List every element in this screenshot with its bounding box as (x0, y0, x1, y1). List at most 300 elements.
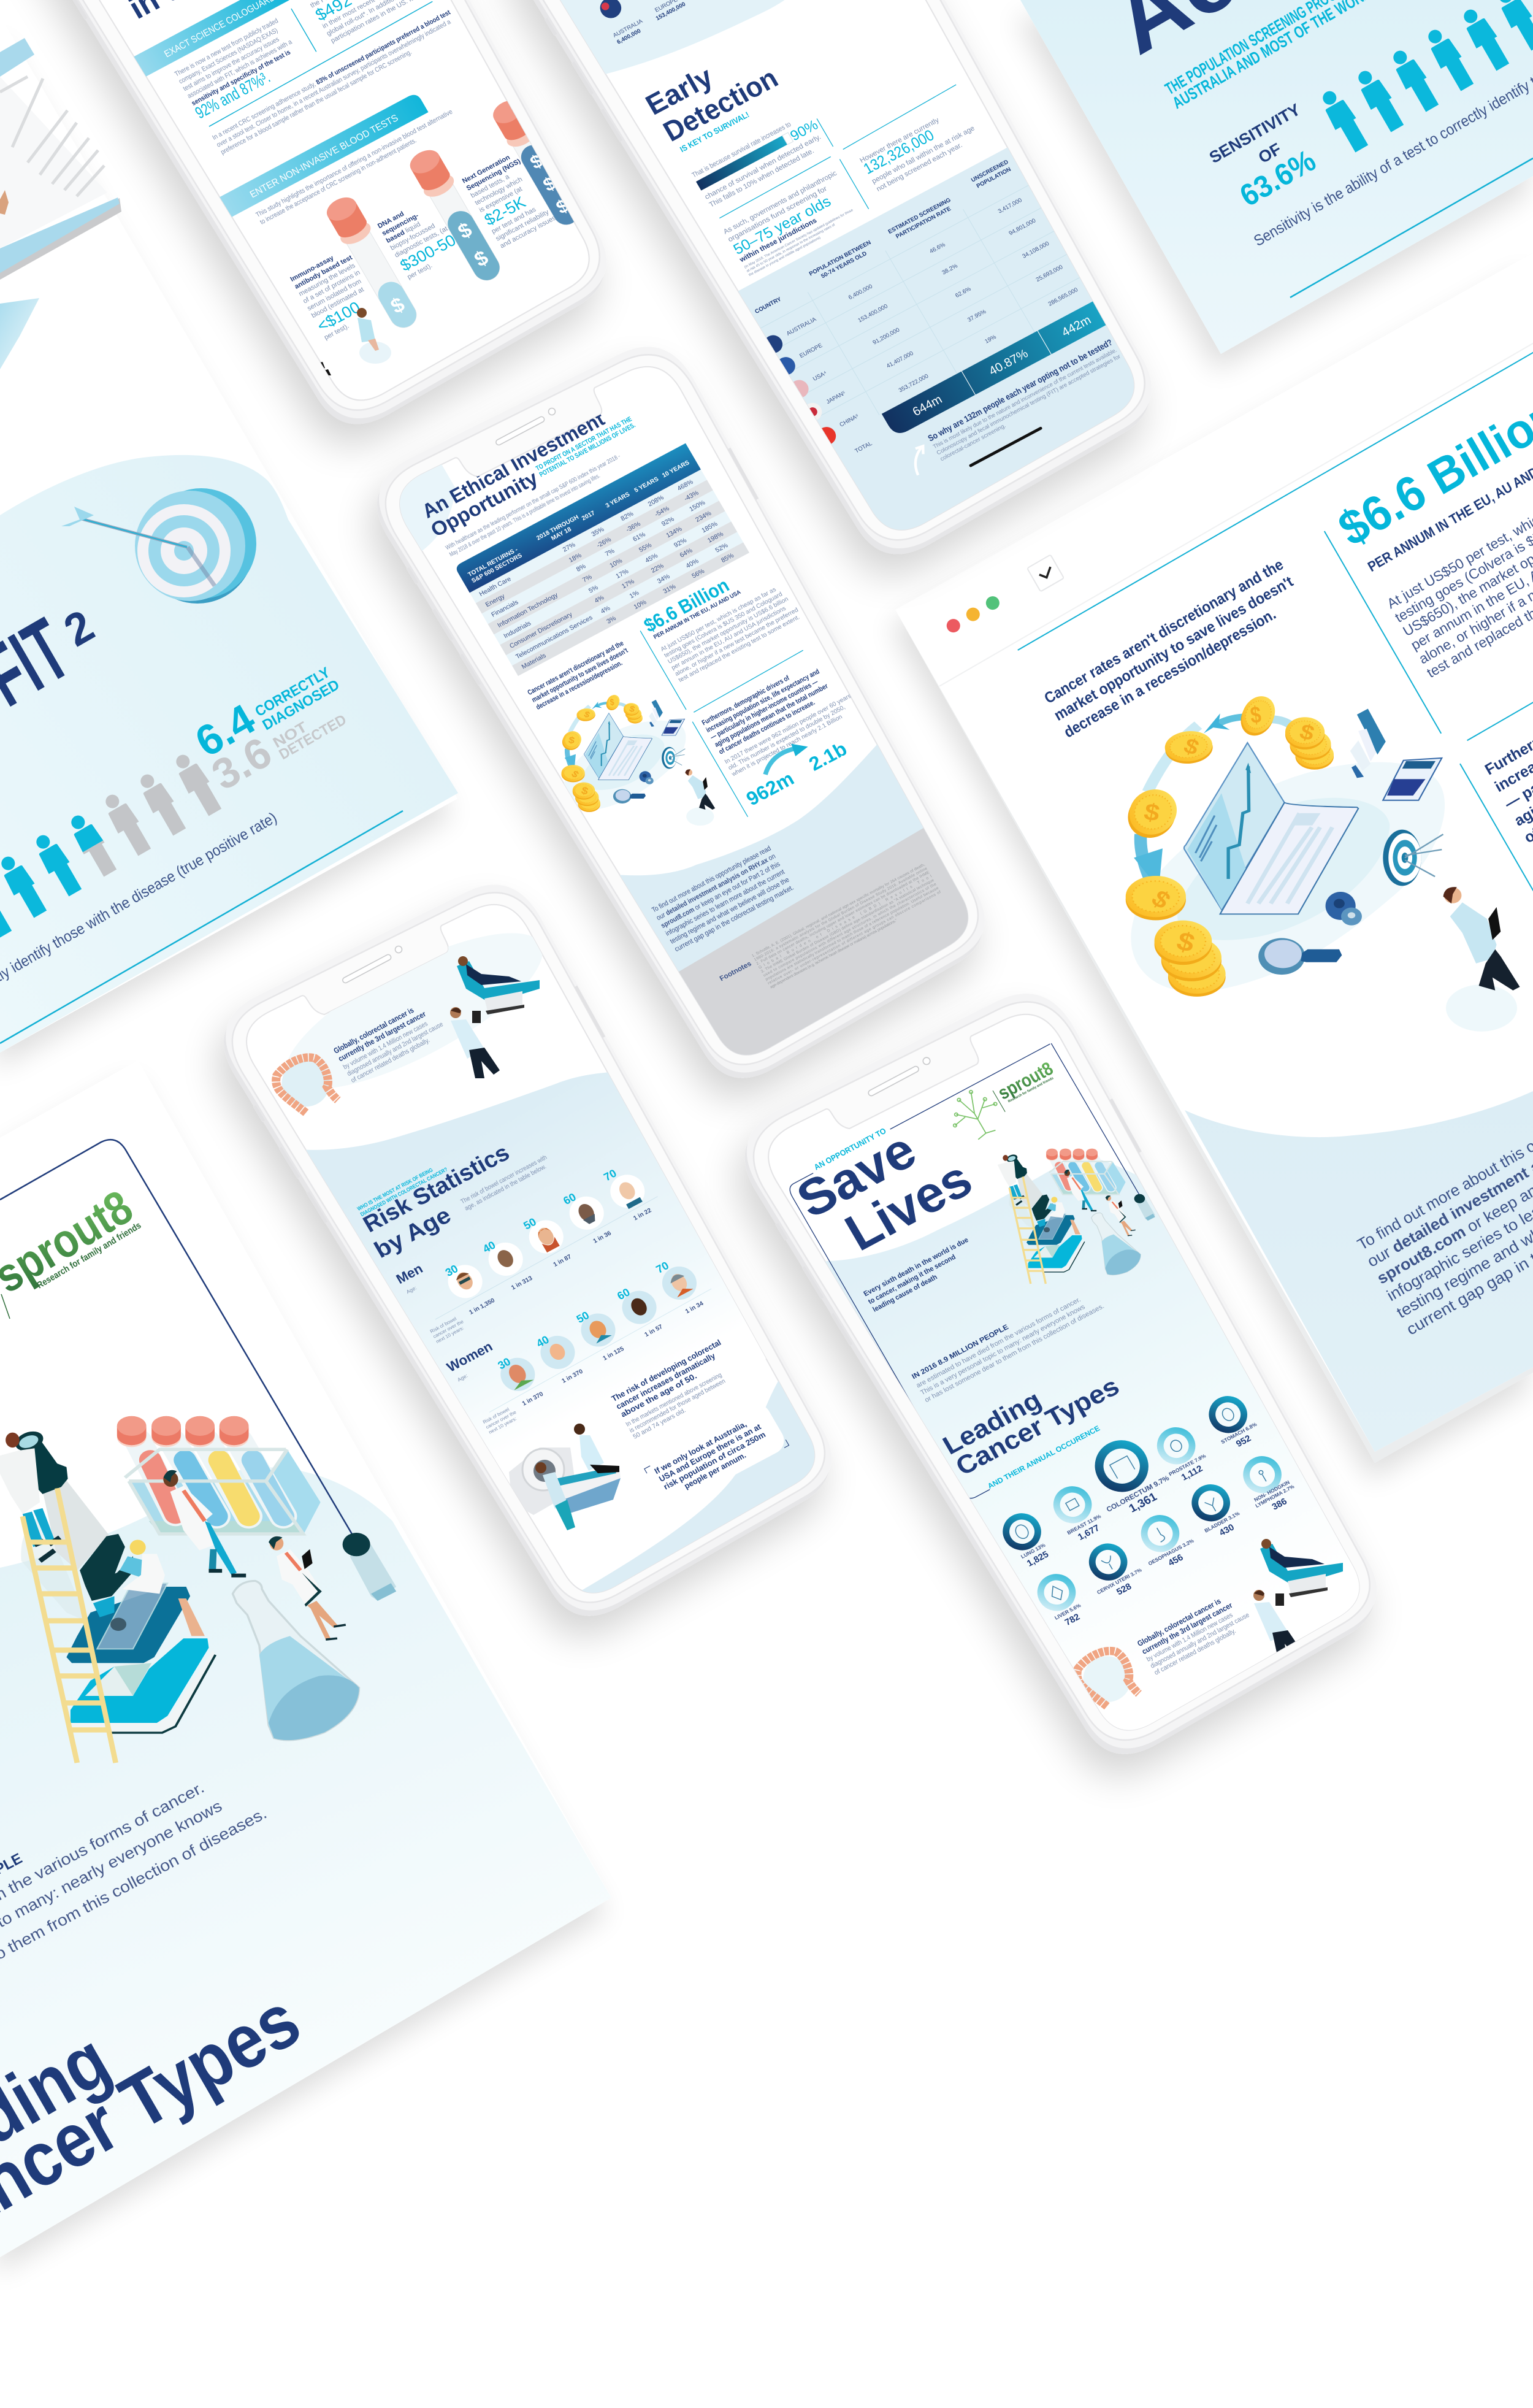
row: men: 1 in 22 (632, 1207, 653, 1222)
row: men: 1 in 1,350 (468, 1297, 496, 1316)
phone: Early Detection (213, 0, 1533, 1777)
table: S&P 600 returns: 61% (632, 531, 647, 543)
table: screening: TOTAL (854, 440, 873, 454)
text: cancer rates: market opportunity to save lives doesn't (1051, 573, 1296, 724)
text: every sixth death: Every sixth death in the world is due (862, 1236, 970, 1298)
text: market opportunity: alone, or higher if a new test became the preferred (674, 607, 800, 678)
table: screening: POPULATION BETWEEN (808, 239, 873, 277)
table: screening: 3,417,000 (997, 197, 1023, 215)
text: globally (1136, 1589, 1255, 1677)
illustration: laboratory small (998, 1149, 1155, 1284)
row: men: 1 in 87 (552, 1253, 573, 1268)
text: DNA sequencing: $300-500 (397, 226, 467, 275)
text: immuno-assay: Immuno-assay (289, 254, 335, 283)
text: governments fund: at risk 45 to 50 year olds, in response to the increasing rates of (746, 223, 836, 274)
row: men: 60 (561, 1191, 578, 1207)
text: DNA sequencing: diagnostic tests, (at (394, 225, 449, 259)
stat: population growth: 2.1b (805, 738, 851, 775)
text: intro: With healthcare as the leading performer on the small cap S&P 600 index this year 2018 - (445, 453, 622, 551)
band: Exact Science (134, 0, 289, 77)
icon: colon (270, 1051, 342, 1122)
illustration: patient and doctor (1253, 1539, 1343, 1661)
heading: Early Detection: IS KEY TO SURVIVAL! (678, 110, 751, 154)
text: demographic drivers: increasing population size, life expectancy and (705, 667, 821, 734)
text: next generation sequencing: Sequencing (NGS) (465, 158, 522, 192)
stat: not detected: DETECTED (276, 711, 350, 763)
heading: risk statistics: Risk Statistics (359, 1140, 514, 1238)
footnotes: age-dependent diseases (e.g. ischemic heart disease or malaria) across populations." (770, 918, 898, 989)
table: screening: JAPAN⁵ (825, 390, 847, 405)
row: men (394, 1148, 671, 1346)
stat: not detected: 3.6 (204, 728, 280, 799)
table: screening: 6,400,000 (847, 283, 874, 301)
phone: Ethical Investment (346, 318, 1045, 1122)
row: men: 1 in 313 (510, 1275, 534, 1292)
donut labels: OESOPHAGUS 3.2% (1147, 1538, 1195, 1566)
text: Exact Science: 92% and 87%³. (192, 67, 273, 122)
row: men: 30 (443, 1262, 460, 1279)
stat: correctly diagnosed: 6.4 (188, 695, 263, 766)
text: 2016 statistics: IN 2016 8.9 MILLION PEOPLE (911, 1323, 1010, 1381)
illustration: patient and doctor (450, 956, 540, 1078)
table: S&P 600 returns: 5% (587, 584, 600, 594)
text: demographic drivers: of cancer deaths continues to increase. (717, 699, 816, 756)
text: 132,326,000 (858, 104, 981, 193)
footnotes: populations are statistically transformed to match those of a reference population. Useful because (765, 886, 939, 982)
wave (562, 687, 1045, 1122)
row: men: 70 (602, 1167, 619, 1183)
table: S&P 600 returns: 7% (604, 547, 616, 558)
text: immuno-assay: measuring the levels (297, 262, 357, 298)
text: next generation sequencing: Next Generation (461, 154, 511, 185)
table: screening: 41,407,000 (885, 350, 915, 370)
table: S&P 600 returns: 10% (632, 598, 648, 611)
text: immuno-assay: per test). (323, 323, 351, 342)
stat: sensitivity of 63.6%: OF (1255, 139, 1284, 167)
text: market opportunity: per annum in the EU, AU and USA jurisdictions (670, 605, 787, 672)
flags row: 153,400,000 (655, 1, 687, 22)
panel: investment sheet (895, 237, 1533, 1463)
phone: Save Lives: 782 (1063, 1612, 1082, 1628)
text: call to action: infographic series to learn more about the current (664, 868, 786, 938)
logo: tree and sprout8: Research for family and friends (1007, 1076, 1054, 1103)
table: S&P 600 returns: 22% (650, 562, 665, 575)
heading: Early Detection (640, 34, 788, 157)
row: men: next 10 years: (435, 1325, 465, 1344)
tube: immuno-assay: $ (387, 293, 409, 318)
row: women: 50 (575, 1309, 591, 1325)
table: S&P 600 returns: 2017 (581, 510, 597, 522)
table: S&P 600 returns: 208% (647, 494, 665, 508)
stat: survival rate: chance of survival when detected early. (703, 133, 822, 201)
footnotes: Global Burden of Disease (GBD) Results Tool (758, 874, 933, 970)
tube: NGS: $ (526, 150, 546, 174)
table: screening: 62.6% (954, 285, 973, 299)
logo: tree and sprout8: sprout8 (994, 1057, 1057, 1103)
text: market opportunity: testing goes (Colvera is $US 350 and Cologuard (663, 591, 784, 659)
phone: Save Lives: 528 (1115, 1582, 1133, 1597)
table: screening: 286,565,000 (1047, 286, 1079, 308)
text: Exact Science: sensitivity and specificity of the test is (191, 48, 292, 107)
tube: NGS (488, 96, 586, 231)
background wave (787, 1079, 1423, 1777)
row: women: Women (444, 1338, 495, 1375)
donut labels: STOMACH 6.8% (1220, 1421, 1258, 1445)
row: men: Men (394, 1260, 426, 1287)
table: S&P 600 returns: 34% (656, 572, 671, 585)
phone: Save Lives: 430 (1218, 1522, 1236, 1538)
tube: DNA sequencing (405, 145, 507, 286)
text: globally: currently the 3rd largest cancer (337, 1010, 427, 1063)
row: men: 1 in 36 (592, 1230, 613, 1245)
donut labels: CERVIX UTERI 3.7% (1096, 1566, 1143, 1595)
row: men: Age: (405, 1284, 418, 1295)
footnotes: 2. Full data on cancer deaths, including upper and lower estimates can be downloaded at the IHME (755, 870, 931, 966)
phone: Risk Statistics (213, 884, 892, 1660)
text: governments fund (722, 169, 862, 277)
text: globally: diagnosed annually and 2nd largest cause (1149, 1611, 1251, 1670)
table: screening: USA⁴ (812, 370, 828, 383)
kicker: AN OPPORTUNITY TO (812, 1126, 888, 1171)
stat: population growth: 962m (743, 767, 798, 810)
text: Exact Science: company, Exact Sciences (NASDAQ:EXAS) (178, 27, 279, 85)
heading: FIT: 2 (55, 600, 102, 656)
text: why not tested: This is most likely due to the nature and inconvenience of the current tests available. (932, 347, 1118, 450)
text: CRC adherence study: preference for a blood sample rather than the usual fecal sample for CRC screening. (220, 48, 413, 156)
table: S&P 600 returns: Industrials (502, 619, 532, 640)
footnotes: Footnotes (718, 960, 753, 983)
table: S&P 600 returns: 27% (562, 541, 577, 553)
footnotes: 1980-2016: a systematic analysis for the Global Burden of Disease Study 2016. Available online (754, 867, 928, 962)
flags row: 6,400,000 (616, 28, 642, 46)
row: men: 50 (521, 1216, 538, 1232)
heading: risk statistics: DIAGNOSED WITH COLORECTAL CANCER? (359, 1166, 449, 1217)
text: Exact Science: associated with FIT, which is achieves with a (186, 38, 294, 100)
row: women: 30 (495, 1355, 513, 1371)
stat: sensitivity of 63.6%: SENSITIVITY (1206, 100, 1304, 167)
text: risk increases: is recommended for those aged between (628, 1378, 727, 1435)
phone: Save Lives: 1,112 (1180, 1464, 1204, 1483)
table: S&P 600 returns: 3% (605, 615, 617, 626)
text: globally: of cancer related deaths globally. (350, 1037, 431, 1084)
text: risk increases (610, 1338, 744, 1441)
phone: testing (0, 0, 606, 424)
illustration: coins small (559, 694, 715, 826)
text: globally: diagnosed annually and 2nd largest cause (346, 1021, 445, 1078)
text: demographic drivers (1482, 592, 1533, 846)
text: immuno-assay: blood (estimated at (310, 286, 365, 320)
text: immuno-assay: of a set of proteins in (302, 269, 362, 305)
table: S&P 600 returns: Energy (484, 592, 507, 608)
text: DNA sequencing: DNA and (377, 210, 405, 230)
stat: survival rate (690, 110, 830, 209)
table: S&P 600 returns: 52% (714, 542, 730, 554)
text: 132,326,000: people who fall within the at risk age (871, 125, 976, 185)
table: S&P 600 returns: 134% (665, 525, 684, 539)
table: S&P 600 returns: 3 YEARS (605, 491, 632, 510)
text: 2017 population: when it is projected to reach nearly 2.1 Billion (730, 714, 844, 778)
heading: Opportunity (427, 466, 542, 541)
table: S&P 600 returns: 2018 THROUGH (535, 514, 580, 542)
table: S&P 600 returns: 10% (608, 557, 624, 569)
callout: risk population: If we only look at Australia, (653, 1419, 748, 1476)
stat: population growth (733, 723, 851, 810)
heading: Save Lives (787, 1105, 982, 1273)
table: S&P 600 returns: 64% (679, 546, 694, 559)
callout: risk population (641, 1399, 789, 1510)
people: sensitivity (1317, 0, 1533, 156)
table: S&P 600 returns: 1% (629, 589, 641, 600)
text: demographic drivers: Furthermore, demographic drivers of (700, 674, 791, 727)
table: S&P 600 returns: 8% (575, 562, 587, 573)
tube: NGS: $ (552, 194, 572, 218)
icon: woman (357, 308, 391, 364)
donut labels: LIVER 5.6% (1053, 1602, 1082, 1621)
text: globally: by volume with 1.4 Million new cases (1145, 1611, 1234, 1663)
text: market opportunity: test and replaced the existing test to some extent. (678, 614, 801, 684)
text: cancer rates: Cancer rates aren't discretionary and the (526, 639, 625, 697)
text: 2016 statistics: are estimated to have died from the various forms of cancer. (915, 1296, 1082, 1389)
table: screening: 153,400,000 (857, 303, 889, 324)
subtitle: TO PROFIT ON A SECTOR THAT HAS THE (535, 416, 633, 472)
donut labels: LYMPHOMA 2.7% (1254, 1483, 1296, 1509)
table: screening: 34,108,000 (1021, 240, 1050, 260)
text: globally: currently the 3rd largest cancer (1141, 1601, 1234, 1656)
text: 2016 statistics: This is a very personal topic to many: nearly everyone knows (919, 1303, 1087, 1397)
logo: tree and sprout8 (942, 1052, 1066, 1146)
panel: Save Lives sheet (0, 1060, 611, 2270)
text: CRC adherence study: In a recent CRC screening adherence study, 83% of unscreened participants preferred a blood test (211, 9, 452, 142)
text: next generation sequencing (461, 148, 559, 250)
text: governments fund: the disease in young and middle aged populations) (748, 236, 822, 277)
row: women (444, 1236, 724, 1436)
row: women: 40 (534, 1333, 551, 1350)
panel: FIT sheet (0, 16, 458, 1111)
text: every sixth death: leading cause of death (871, 1273, 939, 1314)
logo: sprout8: Research for family and friends (35, 1220, 143, 1290)
table: screening: 38.2% (941, 263, 959, 277)
table: S&P 600 returns: 82% (619, 510, 635, 523)
table: S&P 600 returns: 468% (676, 478, 695, 493)
table: S&P 600 returns: 185% (700, 520, 719, 534)
mark: black clipped icons (318, 362, 331, 375)
donut labels (1015, 1421, 1298, 1621)
table: screening: 37.95% (966, 308, 988, 323)
illustration: coins and laptop (1121, 692, 1520, 1032)
band: non-invasive tests: ENTER NON-INVASIVE BLOOD TESTS (248, 113, 400, 200)
footnotes: used to compare populations with different age structures, in which the characteristics of the (762, 882, 938, 978)
table: screening: 91,200,000 (872, 326, 901, 346)
text: DNA sequencing: sequencing- (381, 212, 420, 237)
total bar: 40.87% (987, 347, 1031, 378)
text: Exact Science: test aims to improve the accuracy issues (182, 36, 281, 93)
stat: correctly diagnosed (188, 664, 342, 766)
stat: sensitivity of 63.6%: 63.6% (1234, 143, 1321, 213)
text: globally: Globally, colorectal cancer is (1136, 1597, 1223, 1648)
text: risk increases: above the age of 50. (619, 1371, 698, 1419)
text: cancer rates: Cancer rates aren't discretionary and the (1041, 556, 1286, 707)
row: women: cancer over the (485, 1409, 518, 1430)
table: screening: UNSCREENED (970, 159, 1010, 184)
footnotes: 1. Schuttle, A. E. (2001). Global, regional, and national age-sex specific mortality for 264 causes of death, (751, 862, 926, 958)
table: S&P 600 returns: 5 YEARS (633, 476, 660, 494)
subtitle (535, 416, 637, 478)
footnotes: 3. The IHME Global Burden of Disease (GBD) define age-standardisation as "A statistical technique (760, 878, 935, 974)
phone: Save Lives (745, 994, 1423, 1777)
bottom blob (473, 1336, 892, 1660)
stat: $6.6 Billion: PER ANNUM IN THE EU, AU AND USA (652, 589, 742, 641)
donut labels: PROSTATE 7.9% (1168, 1452, 1207, 1477)
callout: risk population: risk population of circa 250m (662, 1430, 767, 1492)
phone: Save Lives: 1,825 (1025, 1550, 1050, 1569)
text: 132,326,000: However there are currently (858, 116, 941, 164)
phone: Save Lives: 952 (1234, 1433, 1253, 1449)
text: immuno-assay: antibody based test (293, 254, 354, 291)
table: S&P 600 returns: 56% (690, 567, 706, 580)
text: why not tested: So why are 132m people each year opting not to be tested? (927, 338, 1114, 443)
heading: risk statistics (351, 1118, 555, 1263)
text: globally (332, 997, 448, 1084)
row: women: next 10 years: (487, 1416, 518, 1435)
table: S&P 600 returns: 92% (673, 537, 688, 549)
table: S&P 600 returns: -26% (595, 535, 613, 550)
table: screening: 353,722,000 (898, 373, 930, 394)
total bar: 644m (911, 393, 944, 419)
phone: Save Lives: 1,677 (1076, 1523, 1101, 1543)
illustration: MRI scan (509, 1424, 621, 1530)
row: men: cancer over the (432, 1319, 465, 1340)
table: S&P 600 returns: 31% (662, 583, 678, 595)
table: screening: 19% (984, 334, 998, 345)
text: market opportunity (660, 582, 803, 684)
tube: DNA sequencing: $ (454, 218, 476, 243)
text: market opportunity: US$650), the market opportunity is US$6.6 billion (667, 596, 790, 665)
donut labels: COLORECTUM 9.7% (1105, 1474, 1171, 1514)
tube: immuno-assay (322, 193, 424, 334)
text: immuno-assay (289, 247, 383, 342)
row: men: Risk of bowel (429, 1316, 457, 1335)
total bar (882, 296, 1116, 437)
table: screening (705, 131, 1198, 584)
table: S&P 600 returns: 4% (594, 594, 606, 605)
row: women: Age: (456, 1373, 468, 1382)
stat: survival rate: This falls to 10% when detected late. (708, 147, 816, 209)
text: CRC adherence study: over a stool test. Closer to home, in a recent Australian survey, participants overwhelmingly indicated a (215, 18, 453, 149)
table: screening: EUROPE (798, 342, 824, 359)
text: call to action (1354, 1057, 1533, 1339)
top blue area (494, 0, 920, 107)
heading: FIT (0, 600, 102, 725)
text: next generation sequencing: technology which (474, 176, 524, 207)
row: women: 1 in 370 (521, 1390, 545, 1407)
heading: risk statistics: by Age (370, 1202, 456, 1263)
tube: NGS: $ (540, 172, 559, 196)
text: Exact Science: There is now a new test from publicly traded (174, 17, 280, 78)
donut labels: BREAST 11.9% (1066, 1513, 1103, 1536)
table: screening: PARTICIPATION RATE (895, 205, 952, 240)
text: 132,326,000: not being screened each year. (875, 141, 964, 193)
table: screening: 25,693,000 (1035, 264, 1064, 283)
flags row (595, 0, 688, 46)
icon: checkbox (1027, 554, 1064, 592)
heading: Leading Cancer Types: Leading (938, 1385, 1046, 1460)
text: globally: by volume with 1.4 Million new cases (342, 1020, 429, 1071)
table: screening: 94,801,000 (1008, 217, 1037, 237)
table: S&P 600 returns: 40% (685, 557, 700, 570)
text: DNA sequencing (377, 191, 470, 281)
stat: not detected (204, 711, 350, 799)
table: S&P 600 returns: TOTAL RETURNS - (467, 546, 519, 578)
total bar: 442m (1060, 313, 1093, 340)
text: governments fund: (In May 2018, The American Cancer Society has updated guidelines for those (744, 209, 854, 269)
table: S&P 600 returns: 234% (694, 509, 713, 524)
table: S&P 600 returns: Telecommunications Services (514, 614, 594, 661)
row: women: 1 in 34 (684, 1300, 705, 1315)
phone: Save Lives: 456 (1167, 1553, 1185, 1568)
table: S&P 600 returns: Information Technology (496, 591, 560, 629)
table: S&P 600 returns: 18% (568, 551, 583, 564)
text: market opportunity: At just US$50 per test, which is cheap as far as (660, 586, 778, 653)
donut labels: LUNG 13% (1020, 1542, 1047, 1560)
text: immuno-assay: serum isolated from (306, 278, 363, 312)
table: screening: CHINA⁶ (838, 413, 860, 428)
flags (760, 332, 839, 448)
table: screening: 46.6% (928, 241, 947, 255)
text: DNA sequencing: biopsy-focussed (389, 222, 437, 252)
heading: Leading Cancer Types: AND THEIR ANNUAL OCCURENCE (986, 1424, 1101, 1490)
donut labels: BLADDER 3.1% (1203, 1510, 1241, 1534)
text: call to action: current gap gap in the colorectal testing market. (673, 884, 795, 953)
table: S&P 600 returns: Consumer Discretionary (508, 610, 574, 650)
stat: sensitivity of 63.6% (1206, 100, 1321, 213)
text: call to action: testing regime and what we believe will close the (668, 876, 790, 945)
frame line (784, 1044, 1234, 1501)
text: risk increases: cancer increases dramatically (614, 1351, 717, 1411)
table: S&P 600 returns: S&P 600 SECTORS (470, 552, 524, 585)
band: non-invasive tests (198, 92, 429, 229)
table: S&P 600 returns: 150% (688, 499, 707, 513)
table: S&P 600 returns: MAY 18 (550, 526, 573, 542)
text: next generation sequencing: is expensive (at (478, 185, 524, 214)
text: next generation sequencing: significant reliability (495, 209, 551, 243)
table: S&P 600 returns: 17% (614, 567, 630, 580)
text: every sixth death: to cancer, making it the second (867, 1253, 957, 1306)
stat: not detected: NOT (270, 719, 310, 751)
donut labels: NON- HODGKIN (1253, 1479, 1291, 1503)
text: 132,326,000: 132,326,000 (861, 127, 937, 178)
heading: Leading Cancer Types: Cancer Types (951, 1371, 1124, 1481)
table: S&P 600 returns: 198% (706, 530, 725, 545)
text: governments fund: organisations fund screening for (727, 185, 828, 243)
text: 2017 population: old. This number is expected to double by 2050, (727, 704, 847, 772)
text: why not tested: colorectal-cancer screening. (939, 423, 1007, 462)
phone: Save Lives: 386 (1271, 1497, 1289, 1513)
text: market opportunity (1384, 440, 1533, 681)
table: S&P 600 returns: 4% (600, 604, 612, 615)
text: cancer rates: decrease in a recession/depression. (535, 659, 624, 711)
row: women: 1 in 57 (644, 1324, 664, 1338)
table: S&P 600 returns: Health Care (478, 575, 513, 598)
heading: Save Lives: Save (787, 1121, 925, 1229)
text: governments fund: As such, governments and philanthropic (722, 169, 838, 236)
table: S&P 600 returns: 85% (720, 551, 735, 564)
heading: Early Detection: Early (640, 61, 718, 121)
text: study highlights: to increase the acceptance of CRC screening in non-adherent patients. (259, 137, 418, 226)
footnotes (717, 862, 944, 1008)
text: cancer rates: decrease in a recession/depression. (1061, 605, 1279, 742)
stat: correctly diagnosed: DIAGNOSED (260, 677, 342, 734)
table: screening: ESTIMATED SCREENING (887, 197, 952, 236)
